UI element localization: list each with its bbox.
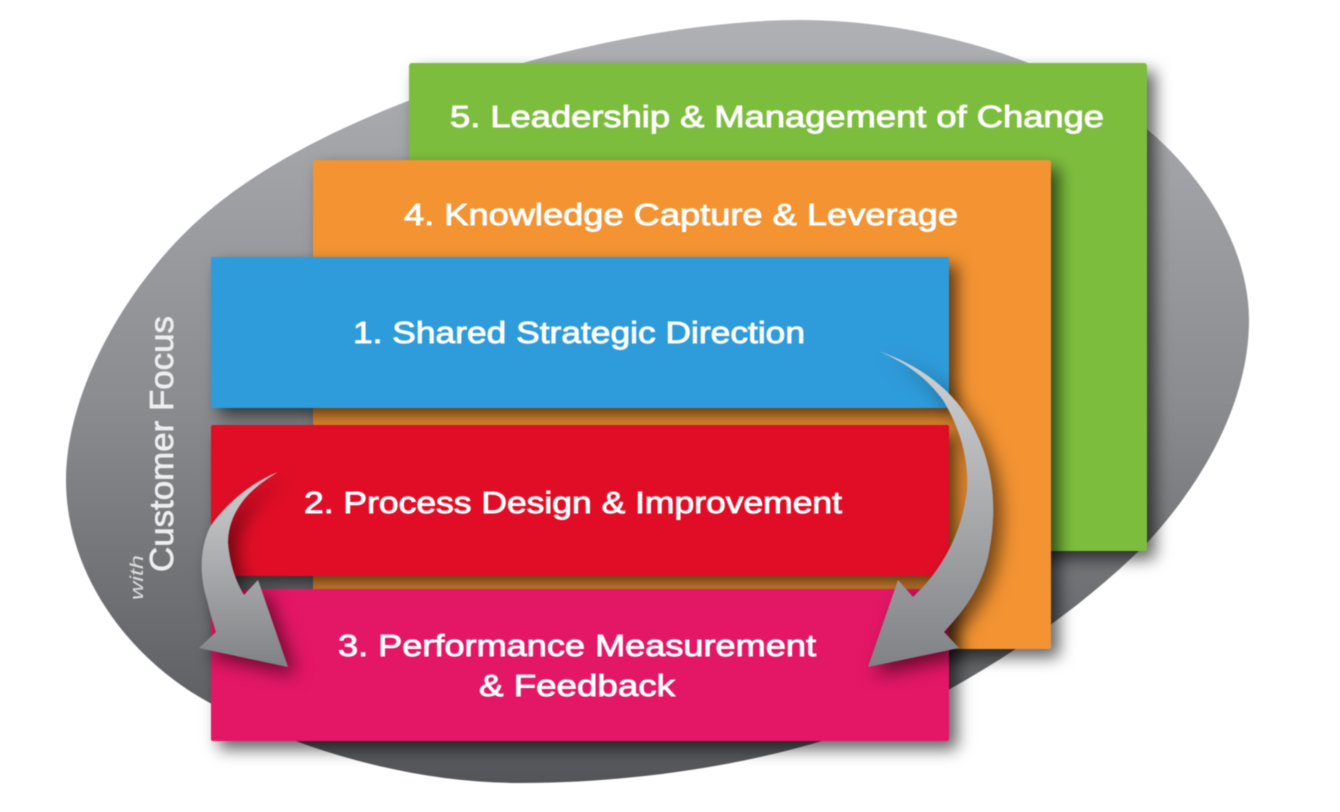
heading 2: 2. Process Design & Improvement: [304, 485, 842, 520]
side label: with Customer Focus: [127, 316, 180, 600]
heading 4: 4. Knowledge Capture & Leverage: [404, 197, 958, 232]
arrow: right curved: [868, 351, 993, 667]
arrow: left curved: [199, 472, 288, 667]
heading 3: 3. Performance Measurement: [338, 628, 816, 663]
heading 5: 5. Leadership & Management of Change: [450, 99, 1104, 134]
panel 1: strategic direction: [211, 257, 949, 408]
heading 3: [338, 628, 816, 703]
heading 3: & Feedback: [479, 668, 676, 703]
panel 2: process design: [211, 425, 949, 576]
side label: with Customer Focus: Customer Focus: [143, 316, 180, 572]
side label: with Customer Focus: with: [127, 555, 147, 600]
panel 3: performance measurement: [211, 589, 949, 741]
heading 1: 1. Shared Strategic Direction: [353, 315, 805, 350]
